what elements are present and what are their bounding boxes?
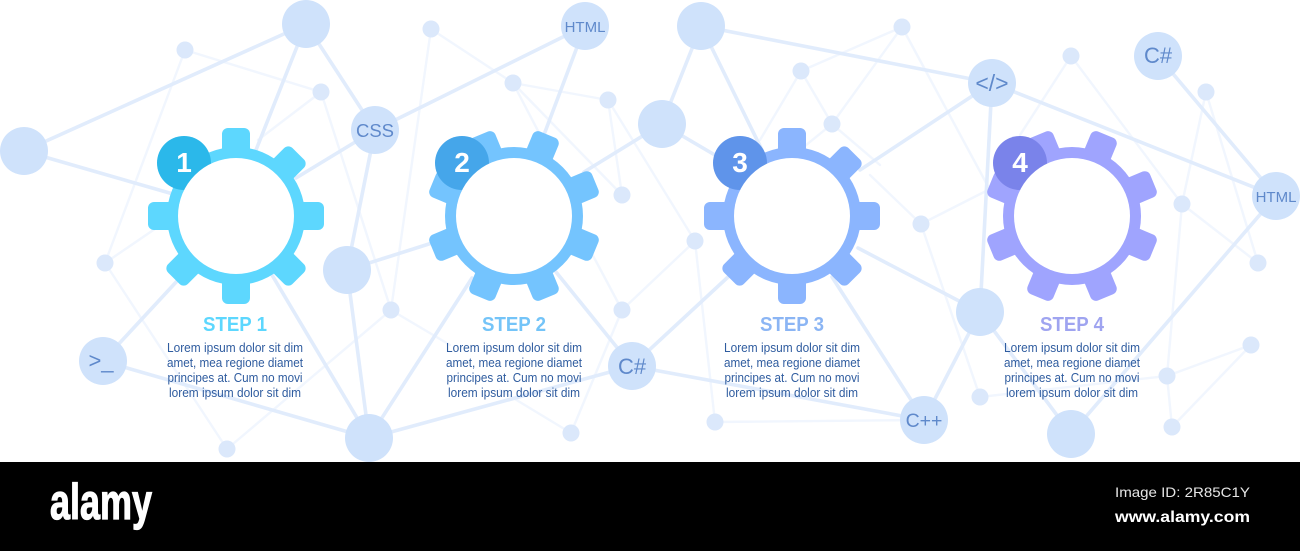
- badge: number 4: [993, 136, 1130, 274]
- text block: step 3: amet, mea regione diamet: [724, 355, 860, 370]
- node: C# upper: C#: [1144, 43, 1173, 68]
- node: HTML right: [1252, 172, 1300, 220]
- text block: step 4: principes at. Cum no movi: [1004, 370, 1140, 385]
- badge: number 4: 4: [1012, 147, 1028, 178]
- node: C++: [900, 396, 948, 444]
- text block: step 2: [446, 340, 582, 400]
- badge: number 3: 3: [732, 147, 748, 178]
- background network: thin links: [105, 27, 1258, 449]
- text block: step 3: principes at. Cum no movi: [724, 370, 860, 385]
- badge: number 3: [713, 136, 850, 274]
- panel: step 4: [985, 129, 1159, 400]
- heading: step 2: STEP 2: [482, 314, 546, 336]
- heading: step 4: STEP 4: [1040, 314, 1105, 336]
- text: image id: Image ID: 2R85C1Y: [1115, 484, 1251, 500]
- heading: step 1: STEP 1: [203, 314, 267, 336]
- node: C# upper: [1134, 32, 1182, 80]
- text block: step 2: Lorem ipsum dolor sit dim: [446, 340, 582, 355]
- node: code tag: </>: [975, 70, 1009, 96]
- icon: gear 2: [427, 129, 601, 303]
- panel: step 2: [427, 129, 601, 400]
- icon: gear 1: [148, 128, 324, 304]
- panel: step 3: [704, 128, 880, 400]
- heading: step 3: STEP 3: [760, 314, 824, 336]
- text: website: www.alamy.com: [1114, 509, 1250, 526]
- badge: number 1: [157, 136, 294, 274]
- text block: step 2: principes at. Cum no movi: [446, 370, 582, 385]
- text block: step 3: lorem ipsum dolor sit dim: [726, 385, 858, 400]
- badge: number 2: [435, 136, 572, 274]
- node: HTML top: [561, 2, 609, 50]
- text block: step 1: amet, mea regione diamet: [167, 355, 303, 370]
- node: terminal prompt: >_: [88, 348, 114, 373]
- text block: step 1: Lorem ipsum dolor sit dim: [167, 340, 303, 355]
- text block: step 4: Lorem ipsum dolor sit dim: [1004, 340, 1140, 355]
- background network: large blank nodes: [0, 0, 1095, 462]
- node: C# lower: [608, 342, 656, 390]
- text block: step 2: lorem ipsum dolor sit dim: [448, 385, 580, 400]
- text block: step 4: [1004, 340, 1140, 400]
- logo: alamy: alamy: [50, 474, 152, 530]
- node: HTML top: HTML: [565, 19, 605, 36]
- footer: watermark bar: [0, 462, 1300, 551]
- text block: step 4: amet, mea regione diamet: [1004, 355, 1140, 370]
- node: C# lower: C#: [618, 354, 647, 379]
- text block: step 1: [167, 340, 303, 400]
- badge: number 1: 1: [176, 147, 192, 178]
- text block: step 1: principes at. Cum no movi: [168, 370, 303, 385]
- background network: thick links: [24, 24, 1276, 438]
- node: C++: C++: [906, 410, 942, 432]
- text block: step 2: amet, mea regione diamet: [446, 355, 582, 370]
- badge: number 2: 2: [454, 147, 470, 178]
- node: terminal prompt: [79, 337, 127, 385]
- text block: step 3: [724, 340, 860, 400]
- node: CSS: [351, 106, 399, 154]
- background network: small nodes: [96, 18, 1266, 458]
- text block: step 4: lorem ipsum dolor sit dim: [1006, 385, 1138, 400]
- node: CSS: CSS: [356, 120, 394, 141]
- text block: step 1: lorem ipsum dolor sit dim: [169, 385, 301, 400]
- panel: step 1: [148, 128, 324, 400]
- icon: gear 3: [704, 128, 880, 304]
- text block: step 3: Lorem ipsum dolor sit dim: [724, 340, 860, 355]
- node: code tag: [968, 59, 1016, 107]
- icon: gear 4: [985, 129, 1159, 303]
- node: HTML right: HTML: [1256, 189, 1296, 206]
